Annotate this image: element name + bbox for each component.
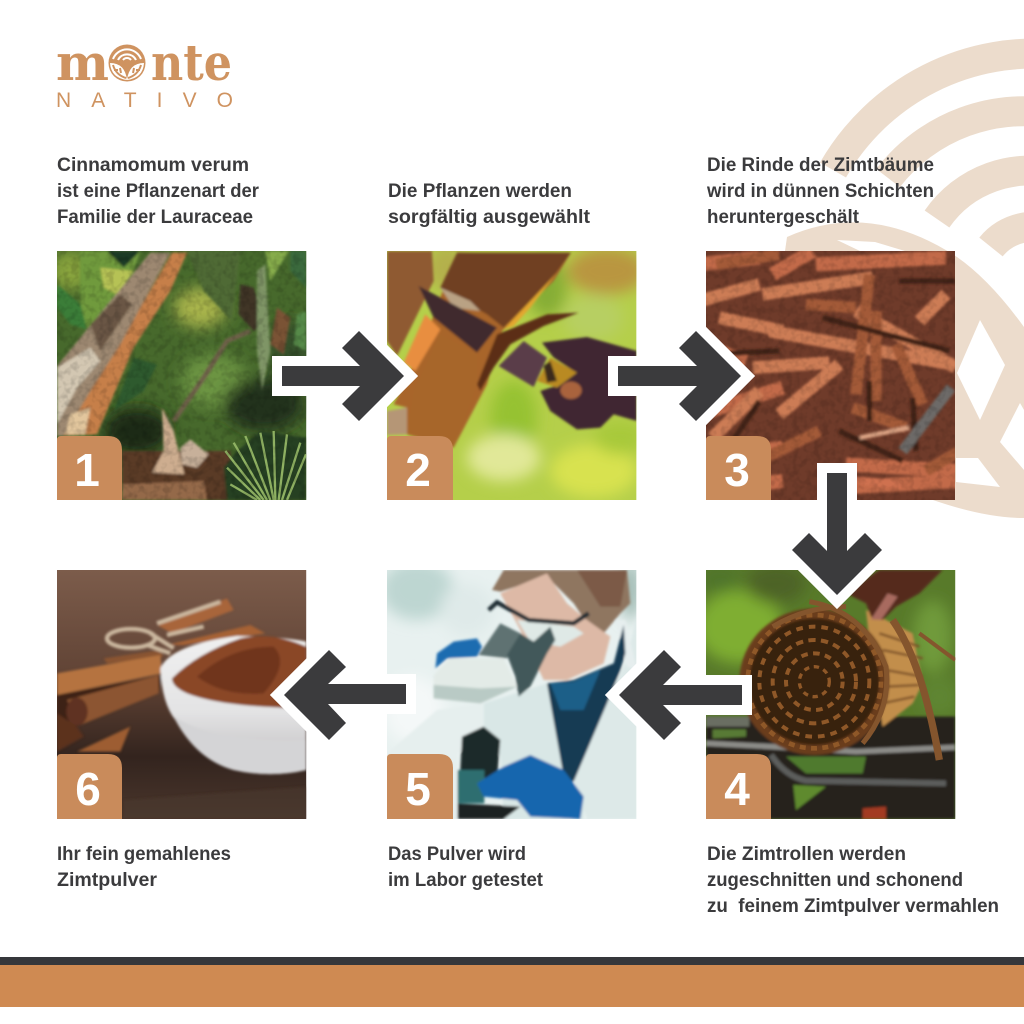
badge 2	[387, 436, 453, 500]
badge 1: 1	[74, 444, 100, 496]
badge 5: 5	[405, 763, 431, 815]
logo wordmark: m	[56, 33, 109, 92]
photo 1: jungle	[50, 251, 310, 500]
text: step 2: Die Pflanzen werden	[388, 181, 572, 202]
text: step 3: wird in dünnen Schichten	[706, 181, 934, 202]
text: step 1: ist eine Pflanzenart der	[57, 181, 260, 202]
badge 2: 2	[405, 444, 431, 496]
text: step 3: Die Rinde der Zimtbäume	[707, 155, 934, 176]
badge 4: 4	[724, 763, 750, 815]
photo 3: cinnamon bark pile	[699, 251, 959, 500]
text: step 1: Cinnamomum verum	[57, 155, 249, 176]
photo 4: bundle of cinnamon rolls	[696, 563, 959, 819]
text: step 4: zugeschnitten und schonend	[707, 870, 963, 891]
text: step 1	[57, 155, 260, 228]
footer bar	[0, 957, 1024, 1007]
logo emblem	[108, 44, 146, 82]
text: step 5	[388, 844, 544, 891]
arrow 5 to 6	[284, 650, 406, 740]
text: step 1: Familie der Lauraceae	[57, 207, 253, 228]
photo 2: knife cutting bark	[387, 244, 647, 500]
logo wordmark end: nte	[151, 33, 232, 92]
arrow 1 to 2	[282, 331, 404, 421]
text: step 3	[706, 155, 934, 228]
text: step 6: Ihr fein gemahlenes	[57, 844, 231, 865]
arrow 4 to 5	[619, 650, 742, 740]
badge 3	[706, 436, 771, 500]
text: step 6	[57, 844, 231, 891]
badge 6: 6	[75, 763, 101, 815]
text: step 4: zu feinem Zimtpulver vermahlen	[707, 896, 999, 917]
text: step 5: im Labor getestet	[388, 870, 544, 891]
text: step 6: Zimtpulver	[57, 870, 158, 891]
arrow 3 to 4	[792, 473, 882, 595]
text: step 4: Die Zimtrollen werden	[707, 844, 906, 865]
background rings watermark	[785, 54, 1024, 518]
text: step 2	[388, 181, 591, 228]
badge 3: 3	[724, 444, 750, 496]
badge 4	[706, 754, 771, 819]
text: step 5: Das Pulver wird	[388, 844, 526, 865]
text: step 2: sorgfältig ausgewählt	[388, 207, 591, 228]
photo 6: bowl of cinnamon powder	[57, 570, 306, 819]
badge 5	[387, 754, 453, 819]
logo subline: NATIVO	[56, 89, 233, 112]
photo 5: scientist with microscope	[380, 560, 640, 819]
badge 6	[57, 754, 122, 819]
text: step 4	[707, 844, 999, 917]
badge 1	[57, 436, 122, 500]
logo	[56, 33, 233, 112]
text: step 3: heruntergeschält	[707, 207, 860, 228]
arrow 2 to 3	[618, 331, 741, 421]
